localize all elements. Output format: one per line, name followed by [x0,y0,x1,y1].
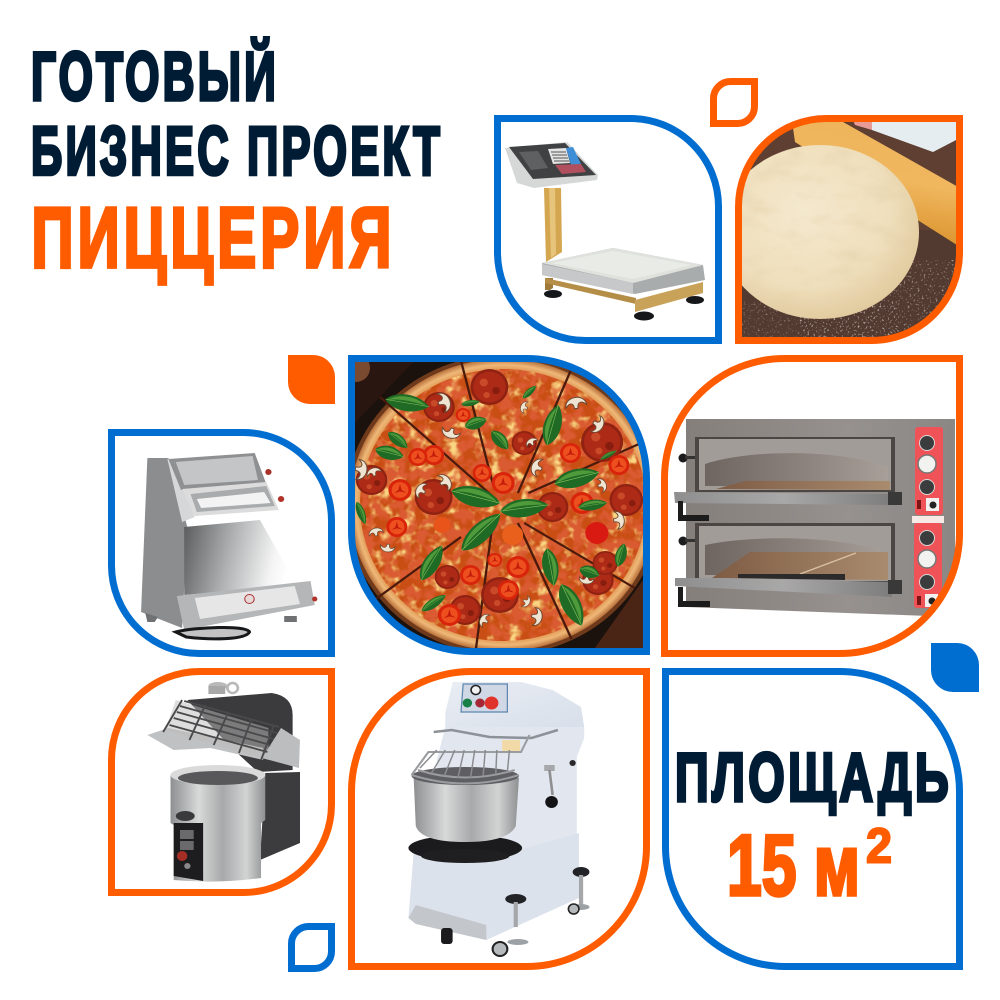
frame: pizza [352,358,646,652]
frame: spiral mixer small [112,672,332,892]
frame: area [666,672,960,966]
illustration: spiral dough mixer [408,682,589,956]
panel: dough roller [112,432,332,654]
panel: scale [498,118,718,340]
superscript 2: 2 [866,820,892,874]
frame: dough roller [112,432,332,654]
panel: area [666,672,960,966]
decorative leaf: blue filled [931,643,979,692]
heading line: БИЗНЕС ПРОЕКТ: БИЗНЕС ПРОЕКТ [31,112,443,189]
panel: pizza oven [664,358,960,654]
frame: spiral mixer large [352,672,646,966]
panel: dough [721,115,963,344]
photo: pizza [355,362,643,648]
frame: scale [498,118,718,340]
panel: spiral mixer small [112,672,332,892]
decorative leaf: orange outline [714,82,754,124]
illustration: double deck oven [674,419,955,617]
heading line: ГОТОВЫЙ: ГОТОВЫЙ [31,37,279,115]
illustration: platform scale [505,142,705,320]
title block [31,37,443,286]
illustration: dough sheeter machine [141,453,317,639]
photo: dough ball on a board [742,122,956,337]
panel: spiral mixer large [352,672,646,966]
decorative leaf: orange filled [288,355,335,404]
illustration: compact mixer [147,682,300,882]
decorative leaf: blue outline [292,926,332,968]
panel: pizza [342,354,661,655]
frame: dough [738,118,960,340]
heading line: ПИЦЦЕРИЯ: ПИЦЦЕРИЯ [32,191,396,286]
value: 15 м²: 15 м [727,818,860,914]
frame: pizza oven [664,358,960,654]
